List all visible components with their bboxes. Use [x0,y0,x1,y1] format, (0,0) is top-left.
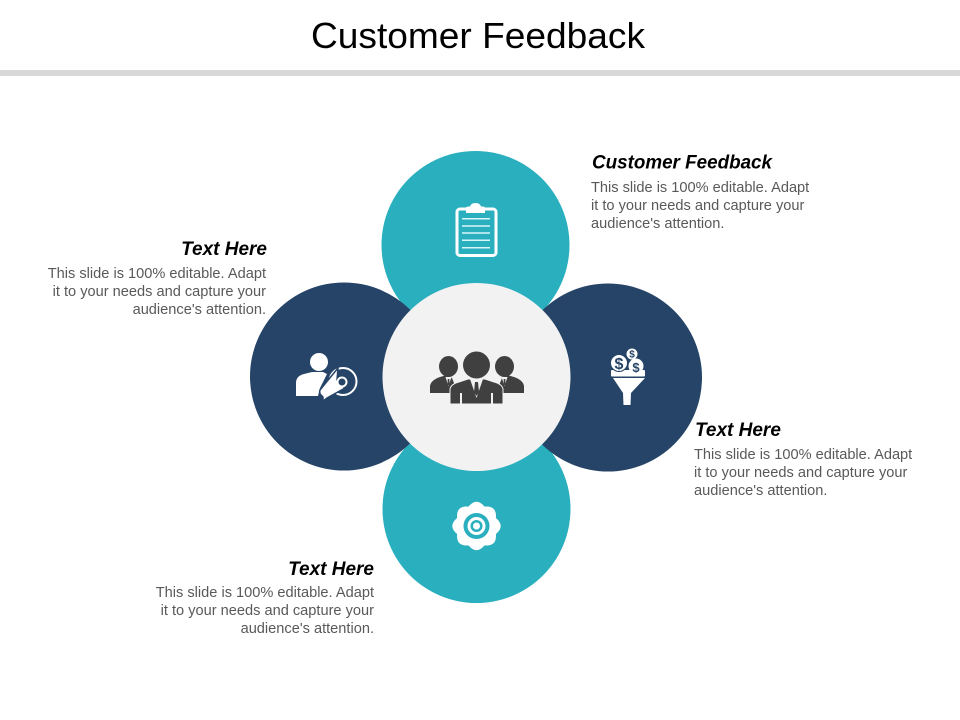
icon: gear [452,502,501,550]
text block: customer feedback: Customer Feedback [592,152,773,174]
icon: money funnel: $ [632,360,640,375]
icon: clipboard [457,203,496,256]
text block: customer feedback: This slide is 100% editable. Adapt [591,180,809,196]
text block: right: Text Here [695,420,781,441]
icon: money funnel [610,348,645,405]
text block: right: audience's attention. [694,483,827,499]
circle: top teal [382,151,570,339]
circle: right navy [514,284,702,472]
circle: bottom teal [382,415,570,603]
text block: bottom: it to your needs and capture your [161,603,374,619]
text block: right: it to your needs and capture your [694,465,908,481]
icon: money funnel: $ [615,356,624,373]
text block: customer feedback: audience's attention. [591,216,724,232]
text block: left [48,239,267,318]
text block: right: This slide is 100% editable. Adapt [694,447,912,463]
text block: customer feedback [591,152,809,232]
title: Customer Feedback [311,15,646,56]
circle: centre [382,283,570,471]
text block: bottom: Text Here [288,559,374,580]
text block: left: it to your needs and capture your [53,284,266,300]
text block: customer feedback: it to your needs and capture your [591,198,805,214]
text block: left: This slide is 100% editable. Adapt [48,266,266,282]
icon: three business people [430,352,524,404]
text block: left: Text Here [181,239,267,260]
text block: right [694,420,912,499]
icon: money funnel: $ [629,350,635,360]
text block: bottom [156,559,374,637]
circle: left navy [250,282,438,470]
circle diagram [250,151,702,603]
text block: left: audience's attention. [133,302,266,318]
icon: person with target [296,353,356,401]
text block: bottom: audience's attention. [241,621,374,637]
text block: bottom: This slide is 100% editable. Adapt [156,585,374,601]
